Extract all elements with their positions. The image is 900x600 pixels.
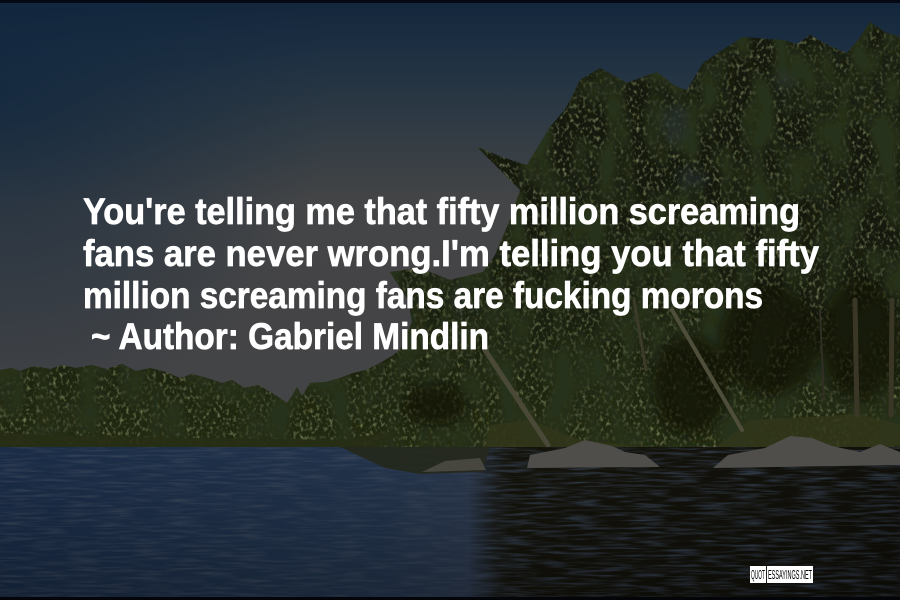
watermark badge xyxy=(750,566,813,583)
author attribution: ~ Author: Gabriel Mindlin xyxy=(91,316,489,357)
quote line 2: fans are never wrong.I'm telling you that fifty xyxy=(83,233,819,274)
top edge strip xyxy=(0,0,900,3)
quote line 1: You're telling me that fifty million screaming xyxy=(83,191,800,232)
forest on the far shore and headland xyxy=(0,22,900,470)
bottom edge strip xyxy=(0,597,900,600)
infographic canvas: ESSAYINGS.NET xyxy=(768,567,812,582)
watermark badge: QUOT xyxy=(751,567,765,582)
dark shadow mass xyxy=(403,280,900,435)
tree reflection on water xyxy=(340,447,490,474)
sky gaps through the foliage xyxy=(451,71,795,314)
water xyxy=(0,447,900,600)
leaning tree trunks xyxy=(485,300,892,445)
shoreline rocks xyxy=(422,436,900,472)
quote line 3: million screaming fans are fucking morons xyxy=(83,275,763,316)
quote text xyxy=(83,191,819,357)
background sky xyxy=(0,0,900,450)
grassy bank xyxy=(0,430,400,447)
